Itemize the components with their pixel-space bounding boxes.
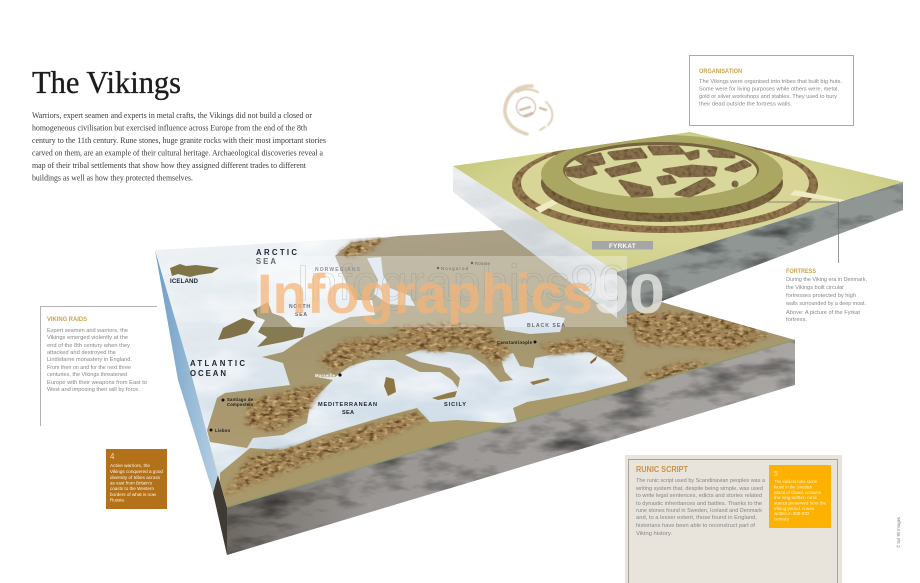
map labels: Santiago de [227,397,254,402]
callout: warriors: as vast from Britain's [110,480,152,486]
map labels: Marseille [315,373,336,378]
map: mountain ranges [225,238,770,494]
callout: rune stone [769,465,831,528]
fortress: label [592,241,653,250]
callout: warriors: diversity of tribes across [110,475,160,480]
callout: warriors: Active warriors, the [110,463,151,468]
fortress block: grass top [453,132,903,272]
panel: viking raids: centuries, the Vikings threatened [47,372,127,378]
map block: rock front side [227,340,795,555]
fortress: label: FYRKAT [609,243,636,250]
map block: ocean surface [155,222,795,507]
panel: viking raids: Europe with their weapons from East to [47,380,147,386]
map labels: Novgorod [441,266,469,271]
intro text block: buildings as well as how they protected themselves. [32,174,193,182]
panel: organisation: their dead outside the fortress walls. [699,102,792,108]
fortress: outer moat and rampart [512,135,845,233]
intro text block: homogeneous civilisation but exercised influence across Europe from the end of the 8th [32,124,307,132]
panel: organisation: gold or silver workshops and stables. They used to bury [699,94,837,100]
map labels: ICELAND [170,278,199,285]
callout: warriors [106,449,167,509]
fortress block: marble left side [453,166,617,318]
map labels: MEDITERRANEAN [318,402,377,408]
panel: viking raids: Vikings emerged violently at the [47,335,128,341]
map block: Europe relief [155,222,800,555]
callout: warriors: Russia. [110,498,125,502]
panel: fortress text: fortresses protected by high [786,293,856,299]
runic body text [635,478,765,537]
callout: rune stone: written in 800-830 [774,511,810,516]
callout: rune stone: found in the Swedish [774,484,813,490]
runic body text: Viking history. [636,531,672,537]
fortress leader line [760,202,838,263]
callout: rune stone: stanza preserved from the [774,500,827,506]
map labels: NORTH [289,304,310,310]
callout: rune stone: island of Öland, contains [774,490,821,495]
callout: rune stone: century [774,516,790,522]
callout: rune stone: The earliest rune stone [774,479,818,484]
map labels: NORWEGIANS [315,267,361,273]
icon: locator globe [505,86,552,134]
panel: viking raids: From then on and for the next three [47,365,131,371]
panel: viking raids: Lindisfarne monastery in England. [47,357,132,363]
map labels: OCEAN [190,369,226,378]
panel: fortress text: During the Viking era in Denmark, [786,277,867,283]
fortress block: grey rock side [617,182,903,318]
map labels: ARCTIC [256,248,297,257]
fortress: longhouses [566,147,750,196]
runic body text: rune stones found in Sweden, Iceland and Denmark [636,508,762,514]
intro text block [32,111,326,182]
fortress block: Fyrkat [453,132,903,318]
map labels: ATLANTIC [190,359,245,368]
title: The Vikings [32,64,181,100]
panel: fortress text: fortress. [786,317,807,323]
panel: fortress text: Above: A picture of the Fyrkat [786,310,861,316]
panel: viking raids: VIKING RAIDS [47,317,87,323]
callout: warriors: 4 [110,452,115,461]
credit: © Sol 90 Images [896,517,901,548]
panel: fortress text: the Vikings built circular [786,285,844,291]
runic body text: The runic script used by Scandinavian peoples was a [636,478,765,484]
map: inland seas [367,257,565,334]
callout: warriors: coasts to the Western [110,486,155,491]
panel: runic script [625,455,842,583]
intro text block: carved on them, are an example of their cultural heritage. Archaeological discoveries reveal a [32,148,323,158]
runic body text: historians have been able to reconstruct part of [636,523,756,529]
map labels: Rostov [475,261,491,266]
map labels: SEA [295,312,307,318]
panel: organisation [690,56,854,126]
panel: organisation: Some were for living purposes while others were, metal, [699,86,840,92]
panel: viking raids: attacked and destroyed the [47,350,116,356]
map labels: BLACK SEA [527,323,565,329]
watermark: Infographics90 [296,255,626,311]
map labels: SEA [342,410,354,416]
panel: viking raids: end of the 8th century when they [47,343,130,349]
map block: left water side [155,250,218,493]
runic body text: and, to a lesser extent, those found in England, [636,515,758,521]
panel: fortress text: walls surrounded by a deep moat. [785,301,866,307]
callout: rune stone: 5 [774,471,778,478]
runic heading: RUNIC SCRIPT [636,465,688,474]
map labels [170,248,565,433]
map: land masses [170,222,800,520]
panel: organisation: ORGANISATION [699,69,742,75]
panel: viking raids: Expert seamen and warriors, the [47,328,128,334]
panel: fortress text: FORTRESS [786,269,816,275]
panel: viking raids: West and imposing their will by force. [47,387,140,393]
map labels: SICILY [444,402,466,408]
runic body text: to dynastic inheritances and battles. Thanks to the [636,501,762,507]
intro text block: century to the 11th century. Rune stones, huge granite rocks with their most important stories [32,136,326,145]
map labels: SEA [256,257,276,266]
intro text block: map of their tribal settlements that show how they assigned different trades to different [32,161,307,170]
callout: rune stone: the long-written runic [774,495,817,500]
runic body text: to write legal sentences, edicts and stories related [636,493,762,499]
map labels: Lisbon [215,428,230,433]
callout: warriors: Vikings conquered a good [110,469,164,474]
watermark: 90 [593,262,665,325]
panel: viking raids [40,306,157,426]
intro text block: Warriors, expert seamen and experts in metal crafts, the Vikings did not build a closed or [32,111,312,120]
panel: fortress text [785,269,867,323]
map labels: Compostela [227,402,254,407]
watermark: Infographics [257,262,593,325]
map: front edge highlight [227,340,795,507]
panel: organisation: The Vikings were organised into tribes that built big huts. [699,79,842,85]
callout: rune stone: Viking period. It was [774,506,814,511]
runic body text: writing system that, despite being simple, was used [635,486,763,492]
map labels: Constantinople [497,340,533,345]
callout: warriors: borders of what is now [110,492,156,497]
